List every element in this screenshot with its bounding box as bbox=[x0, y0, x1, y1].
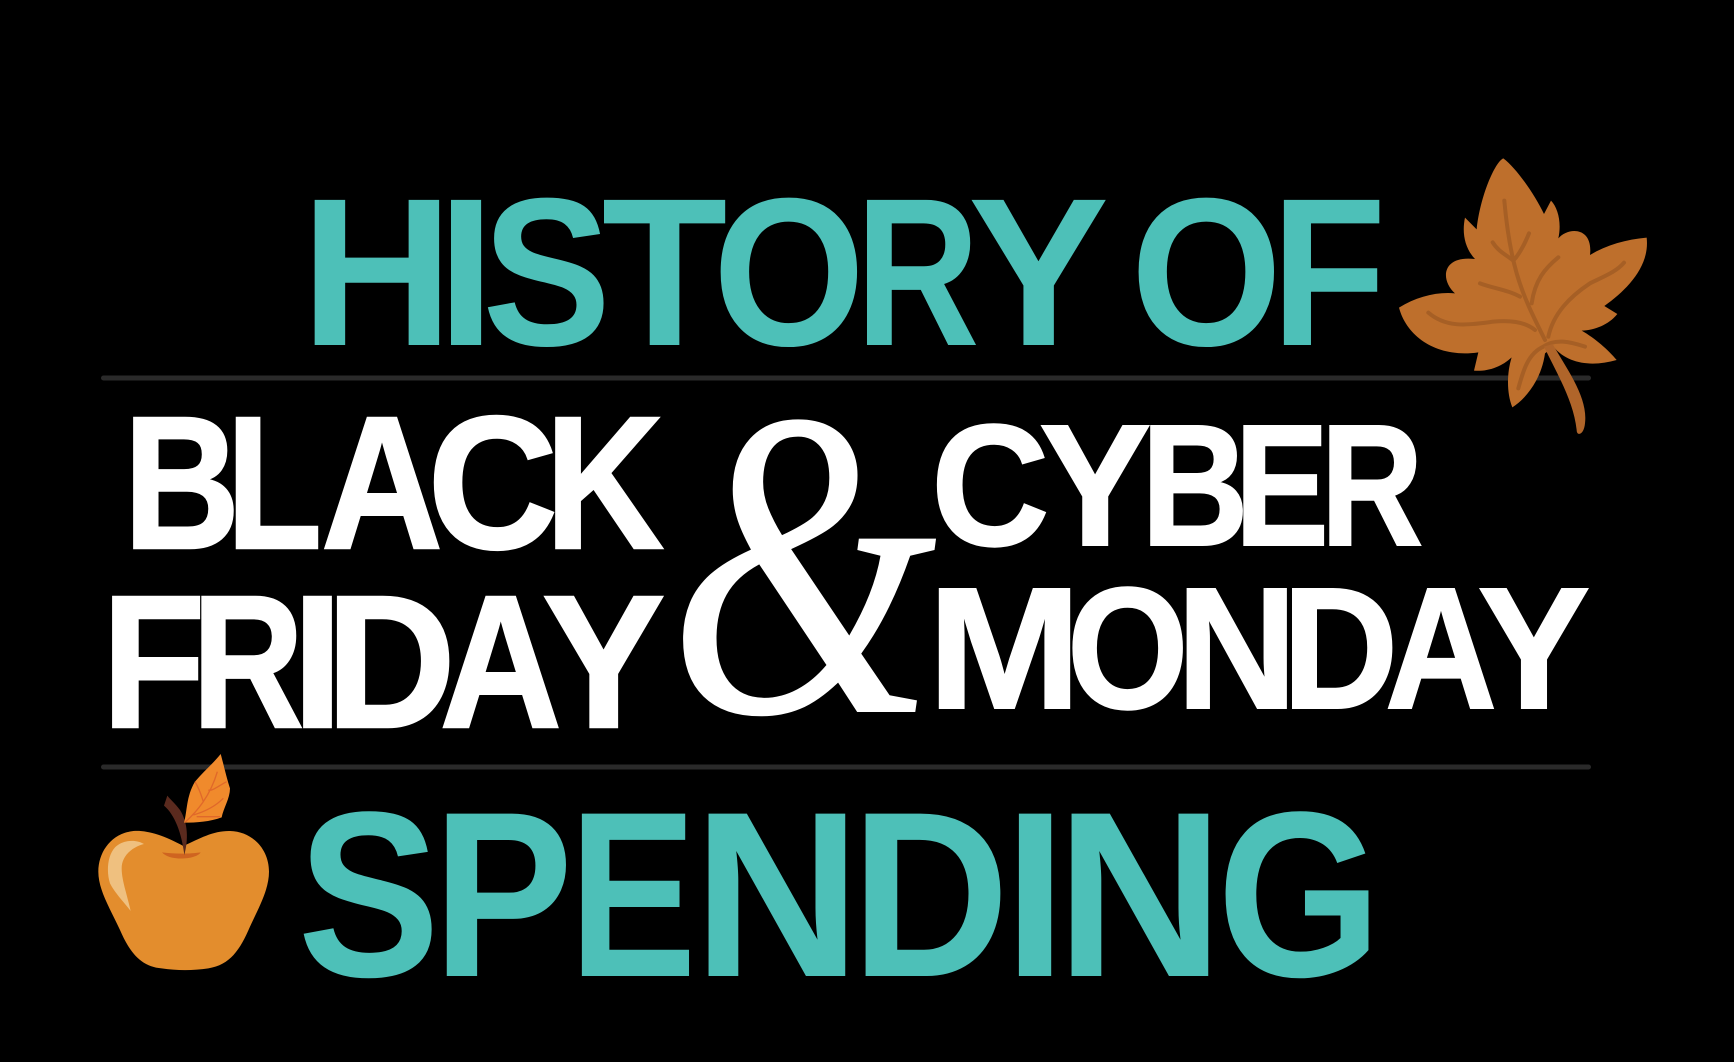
title: CYBER: B bbox=[1141, 388, 1249, 582]
dimple bbox=[162, 852, 201, 858]
title: BLACK: L bbox=[226, 378, 322, 589]
title: HISTORY OF: I bbox=[437, 154, 495, 390]
highlight bbox=[108, 841, 144, 911]
title: HISTORY OF: T bbox=[602, 154, 727, 390]
title: SPENDING: N bbox=[1056, 763, 1224, 1027]
title: FRIDAY: R bbox=[192, 557, 304, 768]
icon: apple bbox=[98, 754, 269, 970]
title: CYBER: E bbox=[1235, 388, 1329, 582]
title: SPENDING: S bbox=[298, 763, 440, 1027]
title: SPENDING: E bbox=[569, 763, 696, 1027]
title: BLACK: B bbox=[123, 378, 240, 589]
apple leaf bbox=[184, 754, 230, 823]
title: CYBER: R bbox=[1321, 388, 1423, 582]
title: SPENDING: N bbox=[693, 763, 861, 1027]
title: BLACK: K bbox=[545, 378, 664, 589]
title: HISTORY OF: O bbox=[1131, 154, 1282, 390]
title: HISTORY OF: F bbox=[1271, 154, 1386, 390]
stem bbox=[164, 796, 187, 855]
title: MONDAY: A bbox=[1385, 551, 1497, 745]
title: HISTORY OF: R bbox=[856, 154, 980, 390]
title: HISTORY OF: S bbox=[482, 154, 611, 390]
title: FRIDAY: I bbox=[292, 557, 343, 768]
title: HISTORY OF: H bbox=[300, 154, 453, 390]
title: MONDAY: N bbox=[1176, 551, 1297, 745]
title: MONDAY: D bbox=[1282, 551, 1398, 745]
title: SPENDING: P bbox=[433, 763, 573, 1027]
title: SPENDING: I bbox=[1004, 763, 1066, 1027]
title: HISTORY OF: Y bbox=[968, 154, 1106, 390]
title: CYBER: Y bbox=[1039, 388, 1151, 582]
title: FRIDAY: D bbox=[326, 557, 456, 768]
title: SPENDING: G bbox=[1217, 763, 1382, 1027]
title: MONDAY: Y bbox=[1478, 551, 1590, 745]
title: FRIDAY: F bbox=[102, 557, 205, 768]
title: MONDAY: M bbox=[928, 551, 1082, 745]
title: FRIDAY: Y bbox=[542, 557, 665, 768]
title: FRIDAY: A bbox=[440, 557, 562, 768]
title: HISTORY OF: O bbox=[713, 154, 865, 390]
icon: autumn leaf bbox=[1399, 158, 1647, 434]
ampersand: & bbox=[668, 321, 939, 808]
title: CYBER: C bbox=[931, 388, 1050, 582]
title: MONDAY: O bbox=[1067, 551, 1189, 745]
title: SPENDING: D bbox=[851, 763, 1010, 1027]
title: BLACK: A bbox=[321, 378, 443, 589]
title: BLACK: C bbox=[428, 378, 558, 589]
